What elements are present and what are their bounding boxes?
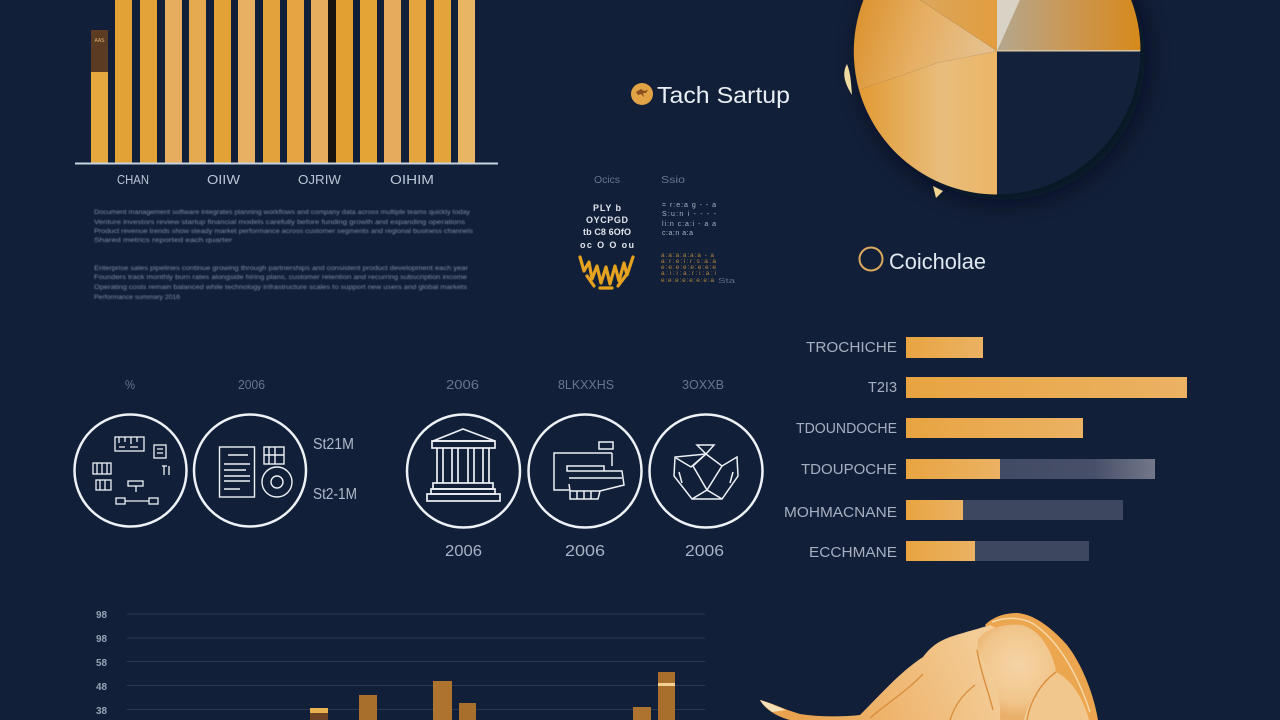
top labels above icon row: 8LKXXHS	[558, 377, 614, 392]
bull horn tip	[760, 700, 786, 712]
column headers: Ocics	[594, 175, 620, 186]
pie accent: left tip	[844, 64, 852, 95]
side value labels	[313, 436, 357, 503]
bull hump	[977, 625, 1056, 720]
pie accent: bottom tip	[933, 186, 943, 198]
right column values: c:a:n a:a	[662, 230, 693, 237]
icon: hand and card circle	[528, 414, 642, 528]
axis labels: OJRIW	[298, 172, 342, 187]
icon: logo badge	[631, 83, 653, 105]
bar labels: TDOUPOCHE	[801, 461, 897, 478]
axis labels	[117, 172, 434, 187]
right column values: = r:e:a g - - a	[662, 202, 716, 209]
right column values: S:u:n i - - - -	[662, 211, 717, 218]
axis line	[75, 162, 498, 164]
gold column values: a:a:a:a:a:a - a	[661, 252, 714, 259]
bottom year labels: 2006	[565, 543, 605, 560]
bar labels: TROCHICHE	[806, 339, 897, 356]
icon: blueprint circle	[74, 414, 186, 526]
y axis labels: 98	[96, 610, 107, 621]
column headers	[594, 175, 686, 186]
gold column values	[661, 252, 716, 284]
panel: bottom column chart	[96, 610, 705, 720]
legend: ring and label	[860, 248, 986, 274]
bull rim highlight	[992, 618, 1090, 712]
text block: two paragraphs: Performance summary 2016	[94, 294, 180, 301]
slice: light gold	[859, 51, 997, 194]
bar labels: MOHMACNANE	[784, 504, 897, 521]
highlighted first bar	[91, 30, 108, 163]
bar labels: TDOUNDOCHE	[796, 420, 897, 437]
gold column values: a:r:e:i:r:s:a:a	[661, 258, 716, 265]
top labels above icon row	[125, 377, 724, 392]
illustration: golden bull	[760, 613, 1098, 720]
text block: two paragraphs: Venture investors review startup financial models carefully before funding growth and expanding operations	[94, 219, 466, 226]
icon: ring	[860, 248, 882, 270]
bars	[115, 0, 475, 163]
text block: two paragraphs: Document management software integrates planning workflows and company data across multiple teams quickly today	[94, 209, 471, 216]
gold column values: a:i:i:a:r:i:a:i	[661, 270, 716, 277]
slice: upper left	[854, 0, 997, 90]
bottom year labels: 2006	[685, 543, 724, 560]
legend label: Coicholae	[889, 249, 986, 274]
text block: two paragraphs: Shared metrics reported each quarter	[94, 237, 233, 244]
bull body	[760, 625, 1050, 720]
icon: bank building circle	[407, 414, 520, 528]
y axis labels: 98	[96, 634, 107, 645]
highlighted first bar: AAS	[94, 38, 105, 44]
grid lines	[127, 614, 705, 710]
bull muscle creases	[870, 650, 1056, 720]
bottom year labels: 2006	[445, 543, 482, 560]
columns	[310, 672, 675, 720]
panel: middle small table	[580, 175, 735, 288]
y axis labels	[96, 610, 107, 717]
top labels above icon row: 2006	[446, 377, 479, 392]
text block: two paragraphs: Enterprise sales pipelines continue growing through partnerships and consistent product development each year	[94, 265, 469, 272]
pie chart	[844, 0, 1145, 200]
side value labels: St21M	[313, 436, 354, 453]
column headers: Ssio	[661, 175, 686, 186]
top labels above icon row: 3OXXB	[682, 377, 724, 392]
axis labels: OIIW	[207, 172, 241, 187]
axis labels: CHAN	[117, 172, 149, 187]
icon: faceted gem circle	[650, 414, 762, 528]
slice: top right	[997, 0, 1140, 51]
small side value: Sta	[718, 278, 735, 285]
bar labels: ECCHMANE	[809, 544, 897, 561]
text block: two paragraphs: Operating costs remain balanced while technology infrastructure scales to support new users and global markets	[94, 284, 468, 291]
icon: document circle	[194, 414, 306, 526]
left column values	[580, 203, 634, 250]
y axis labels: 48	[96, 682, 107, 693]
bar labels: T2I3	[868, 379, 897, 396]
gold column values: e:e:e:e:e:e:e:e	[661, 264, 716, 271]
heading text: Tach Sartup	[657, 82, 790, 108]
left column values: tb C8 6OfO	[583, 227, 631, 237]
bar fills	[906, 337, 1187, 561]
right column values	[662, 202, 717, 237]
gold column values: e:e:e:e:e:e:e:a	[661, 277, 714, 284]
slice: pale wedge	[997, 0, 1022, 51]
bar tracks	[906, 459, 1155, 479]
slice: top	[900, 0, 997, 51]
bull back rim	[985, 613, 1098, 720]
top labels above icon row: %	[125, 377, 135, 392]
side value labels: St2-1M	[313, 486, 357, 503]
right column values: li:n c:a:i - a a	[662, 221, 716, 228]
bar labels	[784, 339, 897, 561]
slice: navy	[997, 51, 1140, 194]
gold crown glyph	[580, 257, 633, 288]
bull lower muscle	[1027, 672, 1089, 720]
text block: two paragraphs: Founders track monthly burn rates alongside hiring plans, customer retention and recurring subscription income	[94, 274, 467, 281]
top labels above icon row: 2006	[238, 377, 265, 392]
slice edge highlight	[997, 50, 1140, 52]
text block: two paragraphs	[94, 209, 474, 301]
axis labels: OIHIM	[390, 172, 434, 187]
panel: top-left vertical bar chart	[75, 0, 498, 187]
bottom year labels	[445, 543, 724, 560]
left column values: PLY b	[593, 203, 622, 213]
y axis labels: 58	[96, 658, 107, 669]
pie shadow	[861, 0, 1145, 200]
left column values: OYCPGD	[586, 215, 628, 225]
text block: two paragraphs: Product revenue trends show steady market performance across customer segments and regional business channels	[94, 228, 474, 235]
y axis labels: 38	[96, 706, 107, 717]
left column values: oc O O ou	[580, 240, 634, 250]
title: logo and heading	[631, 82, 790, 108]
panel: horizontal bar chart	[784, 337, 1187, 561]
